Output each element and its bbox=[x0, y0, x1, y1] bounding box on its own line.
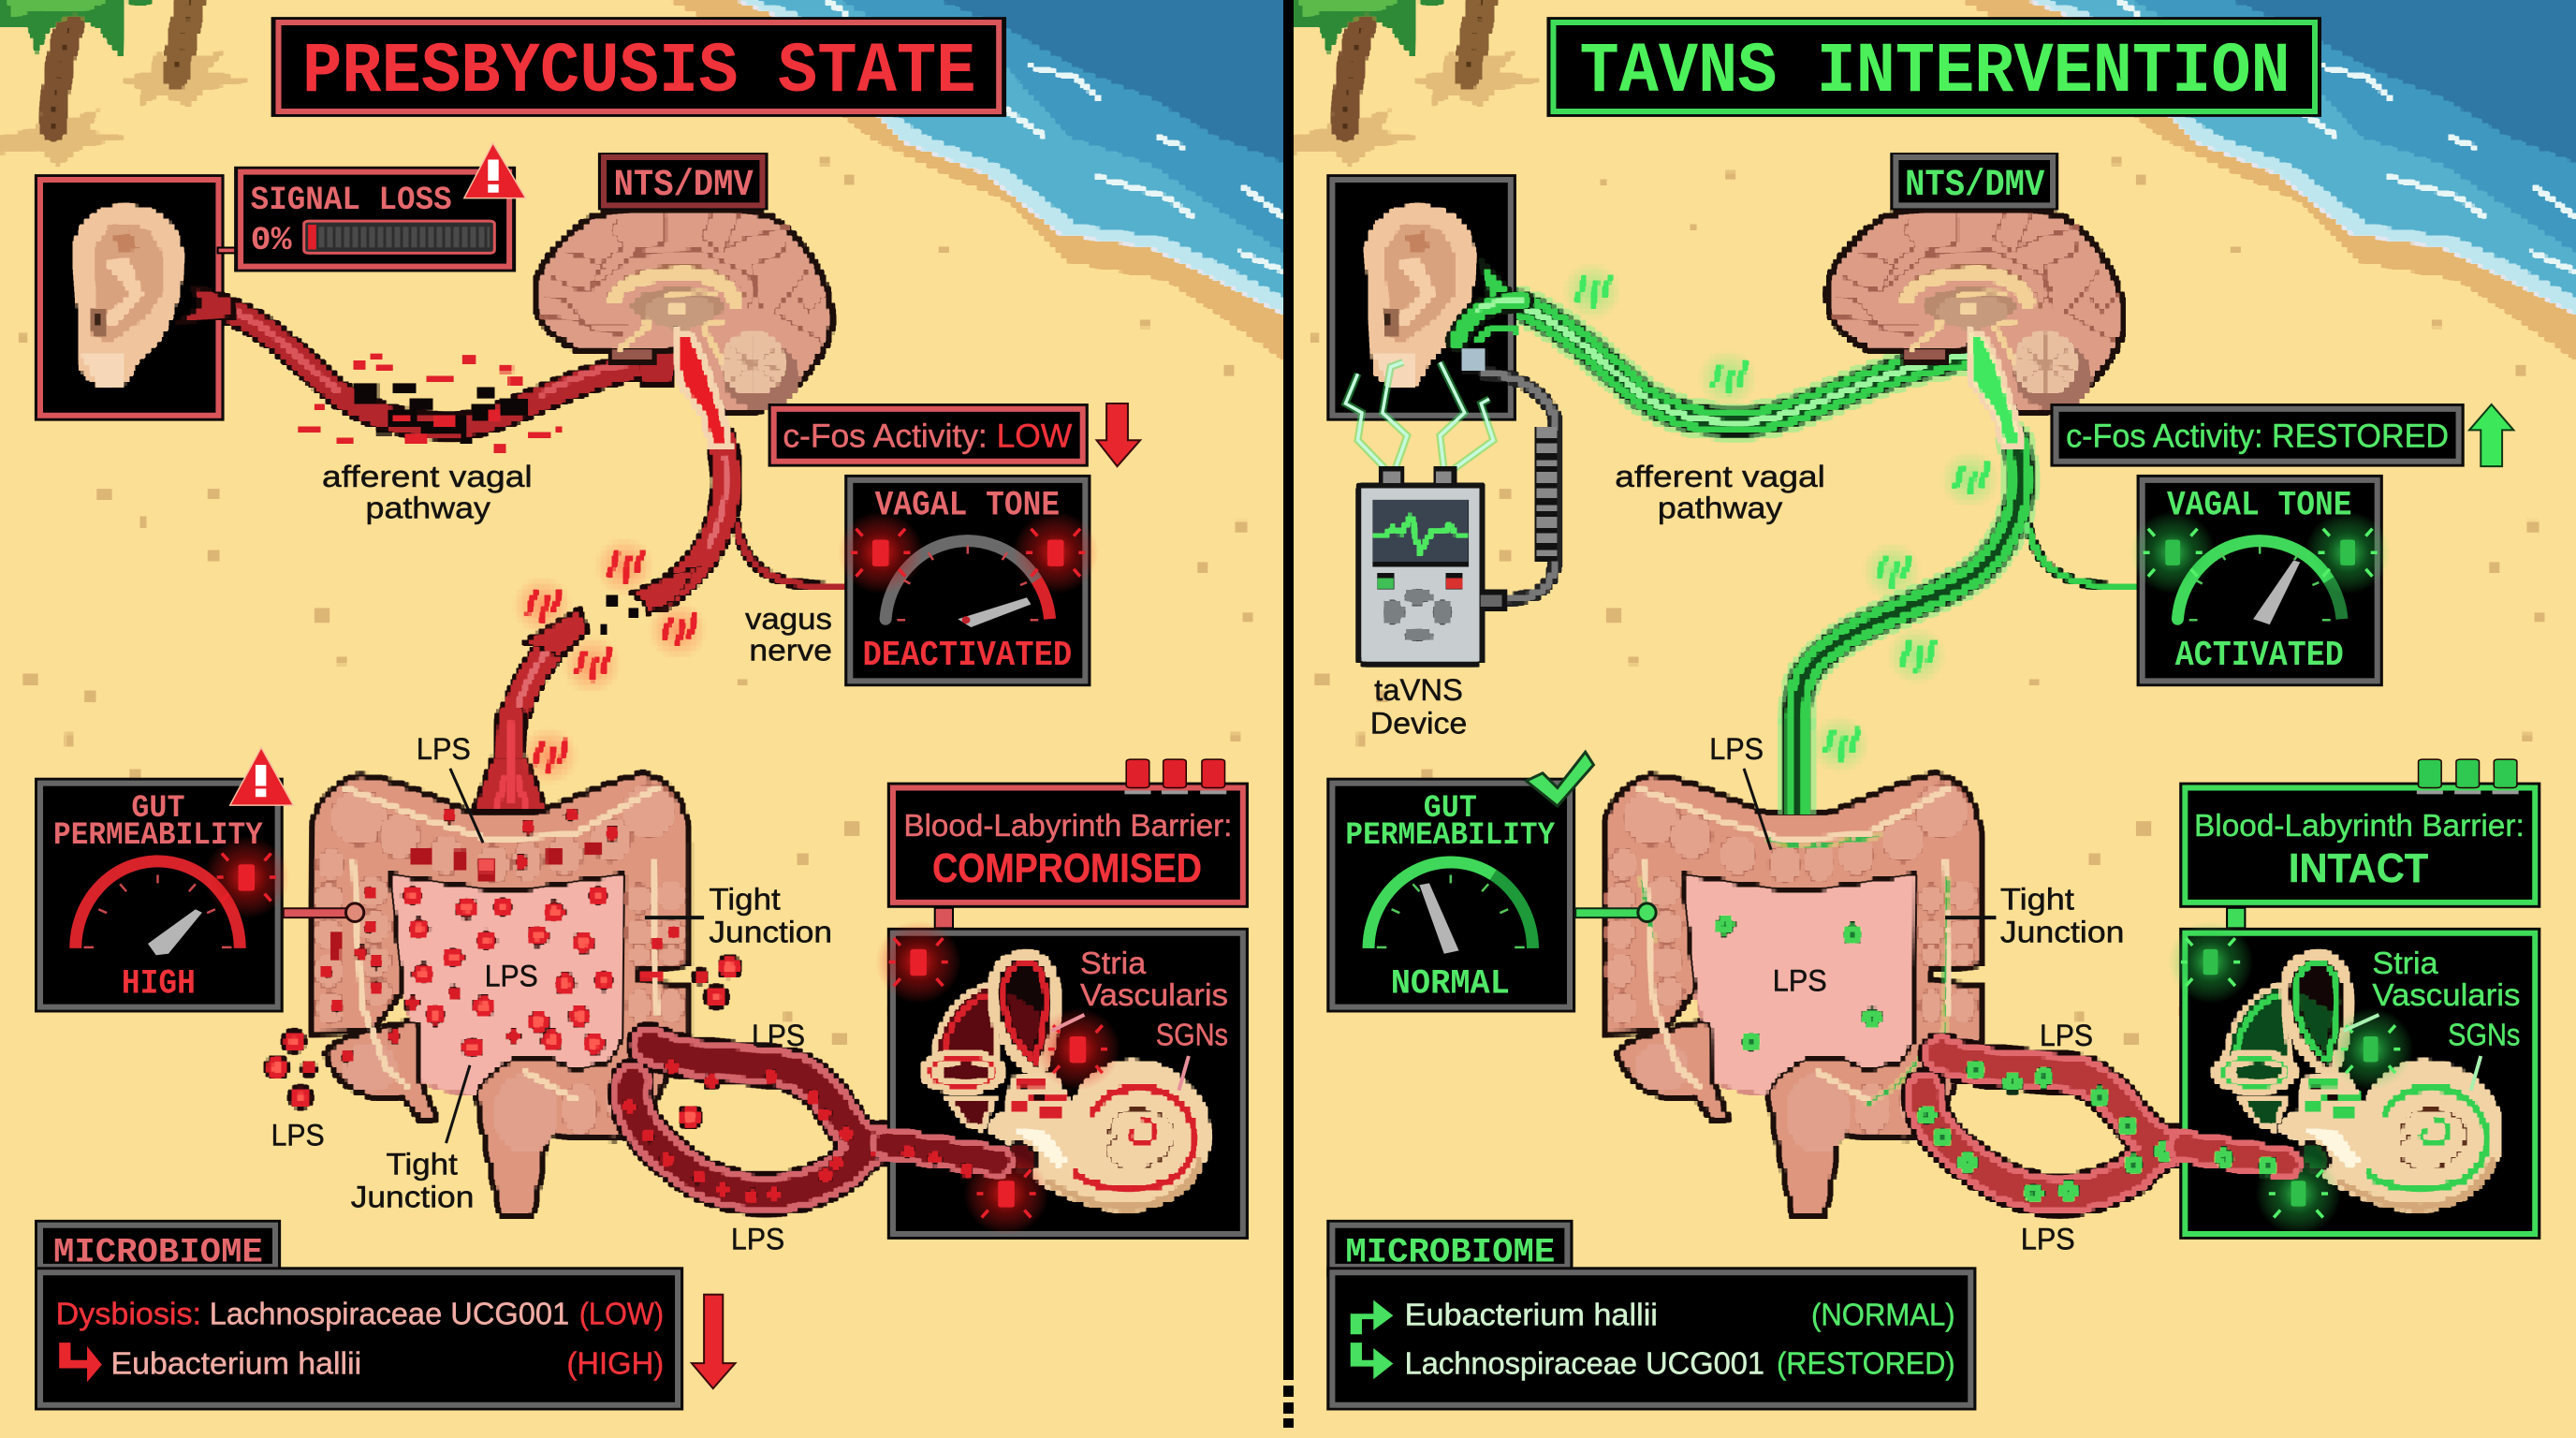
label: tight junction bbox=[1945, 882, 2124, 948]
panel: gut permeability high: HIGH bbox=[122, 964, 196, 1004]
lightning: stimulation arcs bbox=[1345, 362, 1493, 470]
title: presbycusis state: PRESBYCUSIS STATE bbox=[302, 32, 976, 112]
panel: microbiome: Dysbiosis: bbox=[56, 1297, 201, 1331]
tight junction seals bbox=[1641, 836, 1947, 1104]
label: vagus nerve: vagus bbox=[745, 602, 832, 636]
vessel end bbox=[2184, 1146, 2286, 1177]
icon: brain bbox=[1828, 211, 2124, 412]
afferent vagal pathway, damaged bbox=[198, 305, 679, 451]
status LEDs bbox=[1124, 759, 1226, 794]
cable and clip bbox=[1462, 349, 1555, 601]
panel: blood-labyrinth barrier compromised bbox=[887, 759, 1249, 908]
panel: microbiome: Eubacterium hallii bbox=[1405, 1298, 1658, 1332]
panel: microbiome: (NORMAL) bbox=[1811, 1298, 1955, 1332]
illustration: large intestine bbox=[1604, 716, 1982, 1217]
icon: warning triangle bbox=[464, 143, 526, 198]
label: LPS left: LPS bbox=[271, 1119, 325, 1152]
panel: gut permeability high bbox=[35, 778, 289, 1012]
panel: cochlea: SGNs bbox=[1156, 1018, 1228, 1052]
connector: gut gauge to colon bbox=[1575, 903, 1656, 921]
label: tight junction: Tight bbox=[2000, 882, 2074, 916]
background: beach right bbox=[1292, 0, 2576, 1087]
label: tight junction bottom: Junction bbox=[351, 1181, 474, 1214]
label: afferent vagal pathway: afferent vagal bbox=[322, 460, 533, 493]
panel: presbycusis state bbox=[35, 17, 1249, 1411]
afferent vagal pathway, restored bbox=[1486, 263, 1969, 422]
panel: NTS/DMV: NTS/DMV bbox=[1905, 164, 2044, 207]
panel: NTS/DMV: NTS/DMV bbox=[614, 164, 754, 207]
panel: gut permeability high: GUT bbox=[131, 790, 184, 826]
device: taVNS bbox=[1360, 470, 1504, 663]
panel: microbiome: Lachnospiraceae UCG001 bbox=[1405, 1346, 1764, 1381]
label: LPS vessel top: LPS bbox=[752, 1019, 805, 1052]
panel: cochlea bbox=[2168, 921, 2540, 1240]
gauge bbox=[76, 861, 240, 955]
gauge bbox=[1368, 862, 1533, 954]
panel: signal loss: SIGNAL LOSS bbox=[251, 182, 452, 219]
label: taVNS device: taVNS bbox=[1374, 673, 1463, 707]
illustration: inner ear restored bbox=[2212, 955, 2502, 1212]
panel: blood-labyrinth barrier intact: INTACT bbox=[2289, 845, 2428, 891]
panel: vagal tone activated: ACTIVATED bbox=[2175, 636, 2344, 676]
panel: gut permeability normal: GUT bbox=[1424, 790, 1477, 826]
arrow: up bent bbox=[1351, 1300, 1393, 1334]
panel: c-Fos activity bbox=[2050, 404, 2465, 467]
panel: vagal tone deactivated: DEACTIVATED bbox=[862, 636, 1072, 676]
panel: signal loss bbox=[234, 167, 516, 271]
panel: gut permeability normal: NORMAL bbox=[1391, 964, 1510, 1004]
label: vagus nerve bbox=[745, 602, 832, 667]
panel: cochlea bbox=[876, 921, 1249, 1240]
LPS particles, few bbox=[1715, 916, 1882, 1052]
label: afferent vagal pathway bbox=[322, 460, 533, 524]
blood vessels bbox=[622, 1045, 998, 1203]
label: LPS lumen: LPS bbox=[485, 960, 538, 992]
panel: microbiome: (LOW) bbox=[579, 1297, 664, 1331]
panel: taVNS intervention bbox=[1326, 17, 2540, 1411]
panel: gut permeability high: PERMEABILITY bbox=[53, 817, 263, 854]
panel: ear bbox=[35, 174, 234, 421]
arrow: down bent bbox=[1351, 1343, 1393, 1379]
panel: vagal tone deactivated bbox=[838, 475, 1098, 686]
panel: NTS/DMV bbox=[1890, 153, 2058, 210]
arrow: bent bbox=[59, 1343, 102, 1382]
vagus nerve, restored bbox=[1797, 330, 2137, 719]
label: LPS top bbox=[417, 732, 483, 843]
icon: brain bbox=[535, 211, 831, 412]
panel: microbiome: (RESTORED) bbox=[1777, 1346, 1955, 1381]
label: tight junction bottom bbox=[351, 1065, 474, 1214]
gauge bbox=[2177, 541, 2342, 624]
vessel end bbox=[887, 1143, 998, 1178]
panel: vagal tone deactivated: VAGAL TONE bbox=[875, 486, 1060, 525]
panel: microbiome: (HIGH) bbox=[567, 1346, 664, 1381]
connector: barrier to cochlea bbox=[2227, 908, 2245, 928]
label: tight junction right bbox=[645, 882, 832, 948]
panel: cochlea: Vascularis bbox=[1080, 977, 1228, 1013]
label: LPS top: LPS bbox=[417, 732, 471, 766]
label: tight junction: Junction bbox=[2000, 916, 2124, 948]
illustration: large intestine bbox=[266, 719, 740, 1217]
label: LPS vessel bottom: LPS bbox=[731, 1223, 784, 1256]
panel: c-Fos activity: c-Fos Activity: LOW bbox=[783, 418, 1073, 454]
panel: ear bbox=[1326, 174, 1522, 421]
panel: blood-labyrinth barrier compromised: COMPROMISED bbox=[932, 845, 1202, 891]
connector: barrier to cochlea bbox=[935, 908, 953, 928]
panel: vagal tone activated bbox=[2130, 475, 2391, 686]
nerve stub entering gut bbox=[1797, 716, 1868, 813]
nerve stub entering gut bbox=[474, 719, 578, 811]
label: LPS lumen: LPS bbox=[1773, 964, 1827, 997]
connector: gut gauge to colon bbox=[284, 903, 364, 921]
label: taVNS device (second line): Device bbox=[1370, 707, 1467, 741]
label: tight junction right: Tight bbox=[709, 882, 781, 916]
icon: check mark bbox=[1527, 752, 1593, 806]
label: LPS vessel top: LPS bbox=[2040, 1019, 2093, 1052]
label: afferent vagal pathway: afferent vagal bbox=[1615, 460, 1825, 493]
panel: microbiome: MICROBIOME bbox=[1345, 1233, 1555, 1272]
label: LPS top bbox=[1709, 732, 1771, 850]
panel: cochlea: Stria bbox=[2372, 946, 2438, 980]
panel: signal loss: 0% bbox=[251, 222, 292, 259]
progress bar bbox=[304, 221, 494, 253]
title: presbycusis state bbox=[271, 17, 1006, 117]
panel: c-Fos activity bbox=[768, 404, 1089, 467]
panel: gut permeability normal bbox=[1326, 778, 1575, 1012]
connector: ear to signal loss bbox=[218, 247, 239, 253]
blood vessels bbox=[1917, 1054, 2286, 1203]
label: tight junction bottom: Tight bbox=[386, 1147, 458, 1181]
LPS particles bbox=[266, 809, 740, 1127]
panel: microbiome: Eubacterium hallii bbox=[110, 1346, 361, 1381]
label: LPS vessel bottom: LPS bbox=[2021, 1223, 2075, 1256]
vagus nerve, severed bbox=[513, 330, 846, 719]
gauge bbox=[886, 541, 1050, 627]
label: vagus nerve: nerve bbox=[749, 633, 832, 667]
arrow: c-Fos down bbox=[1097, 404, 1140, 466]
panel: microbiome bbox=[35, 1220, 683, 1411]
panel: NTS/DMV bbox=[598, 153, 768, 210]
panel: microbiome bbox=[1326, 1220, 1976, 1411]
arrow: c-Fos up bbox=[2469, 404, 2513, 466]
label: afferent vagal pathway: pathway bbox=[366, 492, 490, 524]
illustration: inner ear damaged bbox=[920, 955, 1210, 1212]
panel: microbiome: Lachnospiraceae UCG001 bbox=[210, 1297, 569, 1331]
label: afferent vagal pathway bbox=[1615, 460, 1825, 524]
title: taVNS intervention bbox=[1546, 17, 2321, 117]
label: tight junction right: Junction bbox=[709, 916, 832, 948]
panel: blood-labyrinth barrier intact bbox=[2179, 759, 2540, 908]
panel: blood-labyrinth barrier compromised: Blood-Labyrinth Barrier: bbox=[903, 808, 1232, 843]
panel: microbiome: MICROBIOME bbox=[53, 1233, 263, 1272]
status LEDs bbox=[2417, 759, 2519, 794]
icon: warning triangle bbox=[230, 747, 293, 805]
arrow: microbiome down bbox=[692, 1295, 735, 1388]
label: afferent vagal pathway: pathway bbox=[1658, 492, 1783, 524]
label: LPS top: LPS bbox=[1709, 732, 1764, 766]
divider bbox=[1283, 0, 1294, 1428]
panel: gut permeability normal: PERMEABILITY bbox=[1345, 817, 1555, 854]
panel: vagal tone activated: VAGAL TONE bbox=[2167, 486, 2351, 525]
panel: cochlea: Stria bbox=[1080, 946, 1146, 980]
